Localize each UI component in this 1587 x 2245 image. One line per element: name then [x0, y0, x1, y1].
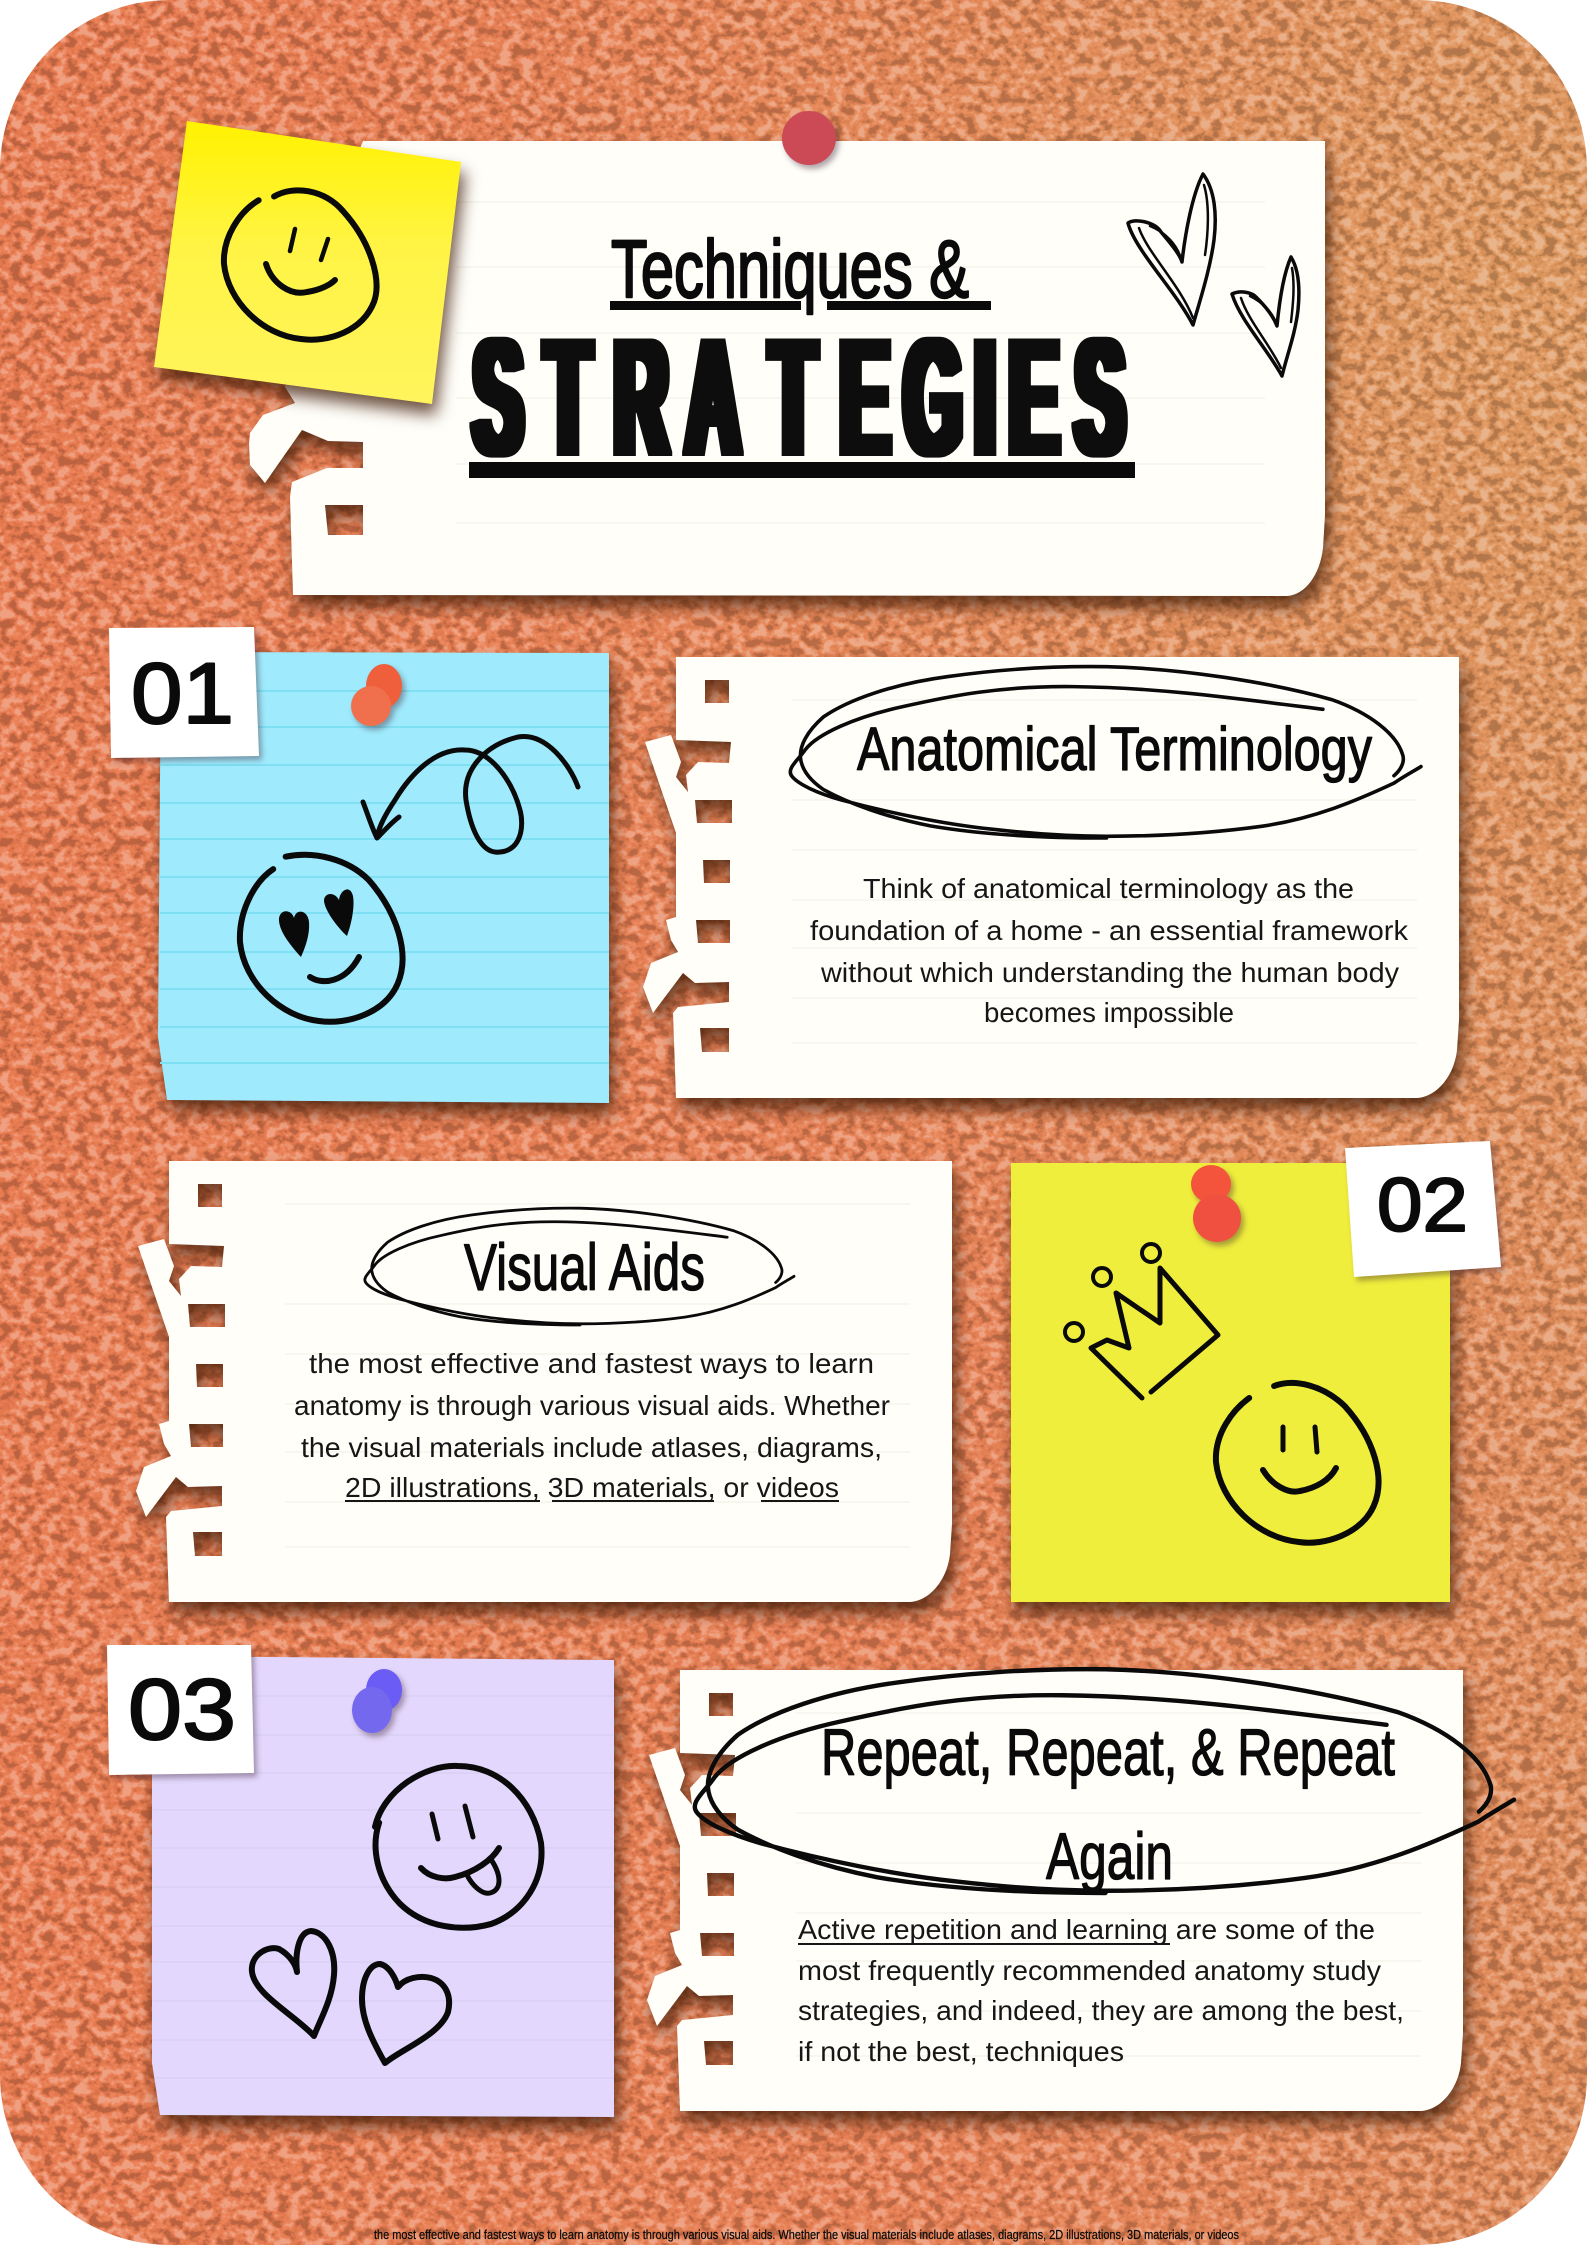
panel: repeat: [647, 1669, 1514, 2111]
number tag 01: 01: [131, 646, 234, 742]
number tag 02: [1345, 1141, 1501, 1277]
body text: [798, 1914, 1404, 2067]
sticky note: yellow with smiley: [154, 121, 461, 404]
heading: [821, 1715, 1395, 1893]
body text: without which understanding the human body: [820, 957, 1399, 988]
heading: Again: [1046, 1819, 1173, 1893]
icon: crown: [1065, 1244, 1218, 1398]
icon: heart-eyes smiley: [240, 855, 403, 1022]
sticky note: blue: [158, 652, 609, 1103]
icon: smiley: [1216, 1383, 1379, 1543]
body text: strategies, and indeed, they are among the best,: [798, 1995, 1404, 2026]
number tag 02: 02: [1377, 1163, 1468, 1248]
scribble oval: [365, 1208, 794, 1325]
body text: if not the best, techniques: [798, 2036, 1124, 2067]
panel: visual aids: [136, 1161, 952, 1602]
heading: Repeat, Repeat, & Repeat: [821, 1715, 1395, 1789]
scribble oval: [790, 667, 1421, 838]
body text: Think of anatomical terminology as the: [863, 873, 1354, 904]
body text: the most effective and fastest ways to learn: [309, 1348, 874, 1379]
body text: the visual materials include atlases, diagrams,: [301, 1432, 882, 1463]
scribble oval: [695, 1669, 1514, 1893]
sticky note: yellow with crown: [1011, 1163, 1450, 1602]
body text: anatomy is through various visual aids. Whether: [294, 1390, 890, 1421]
pin: orange-red: [351, 664, 402, 726]
icon: hearts: [252, 1931, 449, 2063]
body text: Active repetition and learning are some of the: [798, 1914, 1375, 1945]
icon: tongue smiley: [375, 1766, 542, 1928]
body text: [810, 873, 1409, 1028]
icon: two hearts: [1128, 174, 1299, 376]
body text: most frequently recommended anatomy study: [798, 1955, 1381, 1986]
number tag 03: 03: [128, 1662, 236, 1758]
pin: red: [782, 111, 836, 165]
title line 2: STRATEGIES: [473, 306, 1125, 490]
title line 1: Techniques &: [611, 224, 969, 315]
sticky note: lavender: [152, 1656, 614, 2117]
number tag 03: [107, 1645, 254, 1775]
body text: becomes impossible: [984, 997, 1234, 1028]
icon: smiley: [224, 190, 376, 340]
arrow: looping scribble: [363, 736, 578, 852]
body text: 2D illustrations, 3D materials, or videos: [345, 1472, 839, 1503]
panel: anatomical terminology: [643, 657, 1459, 1098]
heading: Anatomical Terminology: [857, 715, 1372, 783]
number tag 01: [109, 627, 259, 758]
pin: purple: [352, 1669, 402, 1733]
pin: red: [1191, 1165, 1241, 1242]
heading: Visual Aids: [464, 1230, 705, 1304]
footer caption: the most effective and fastest ways to learn anatomy is through various visual aids. Whether the visual materials include atlases, diagrams, 2D illustrations, 3D materials, or videos: [374, 2227, 1239, 2242]
body text: [294, 1348, 890, 1503]
body text: foundation of a home - an essential framework: [810, 915, 1409, 946]
panel: title paper: [249, 111, 1325, 596]
